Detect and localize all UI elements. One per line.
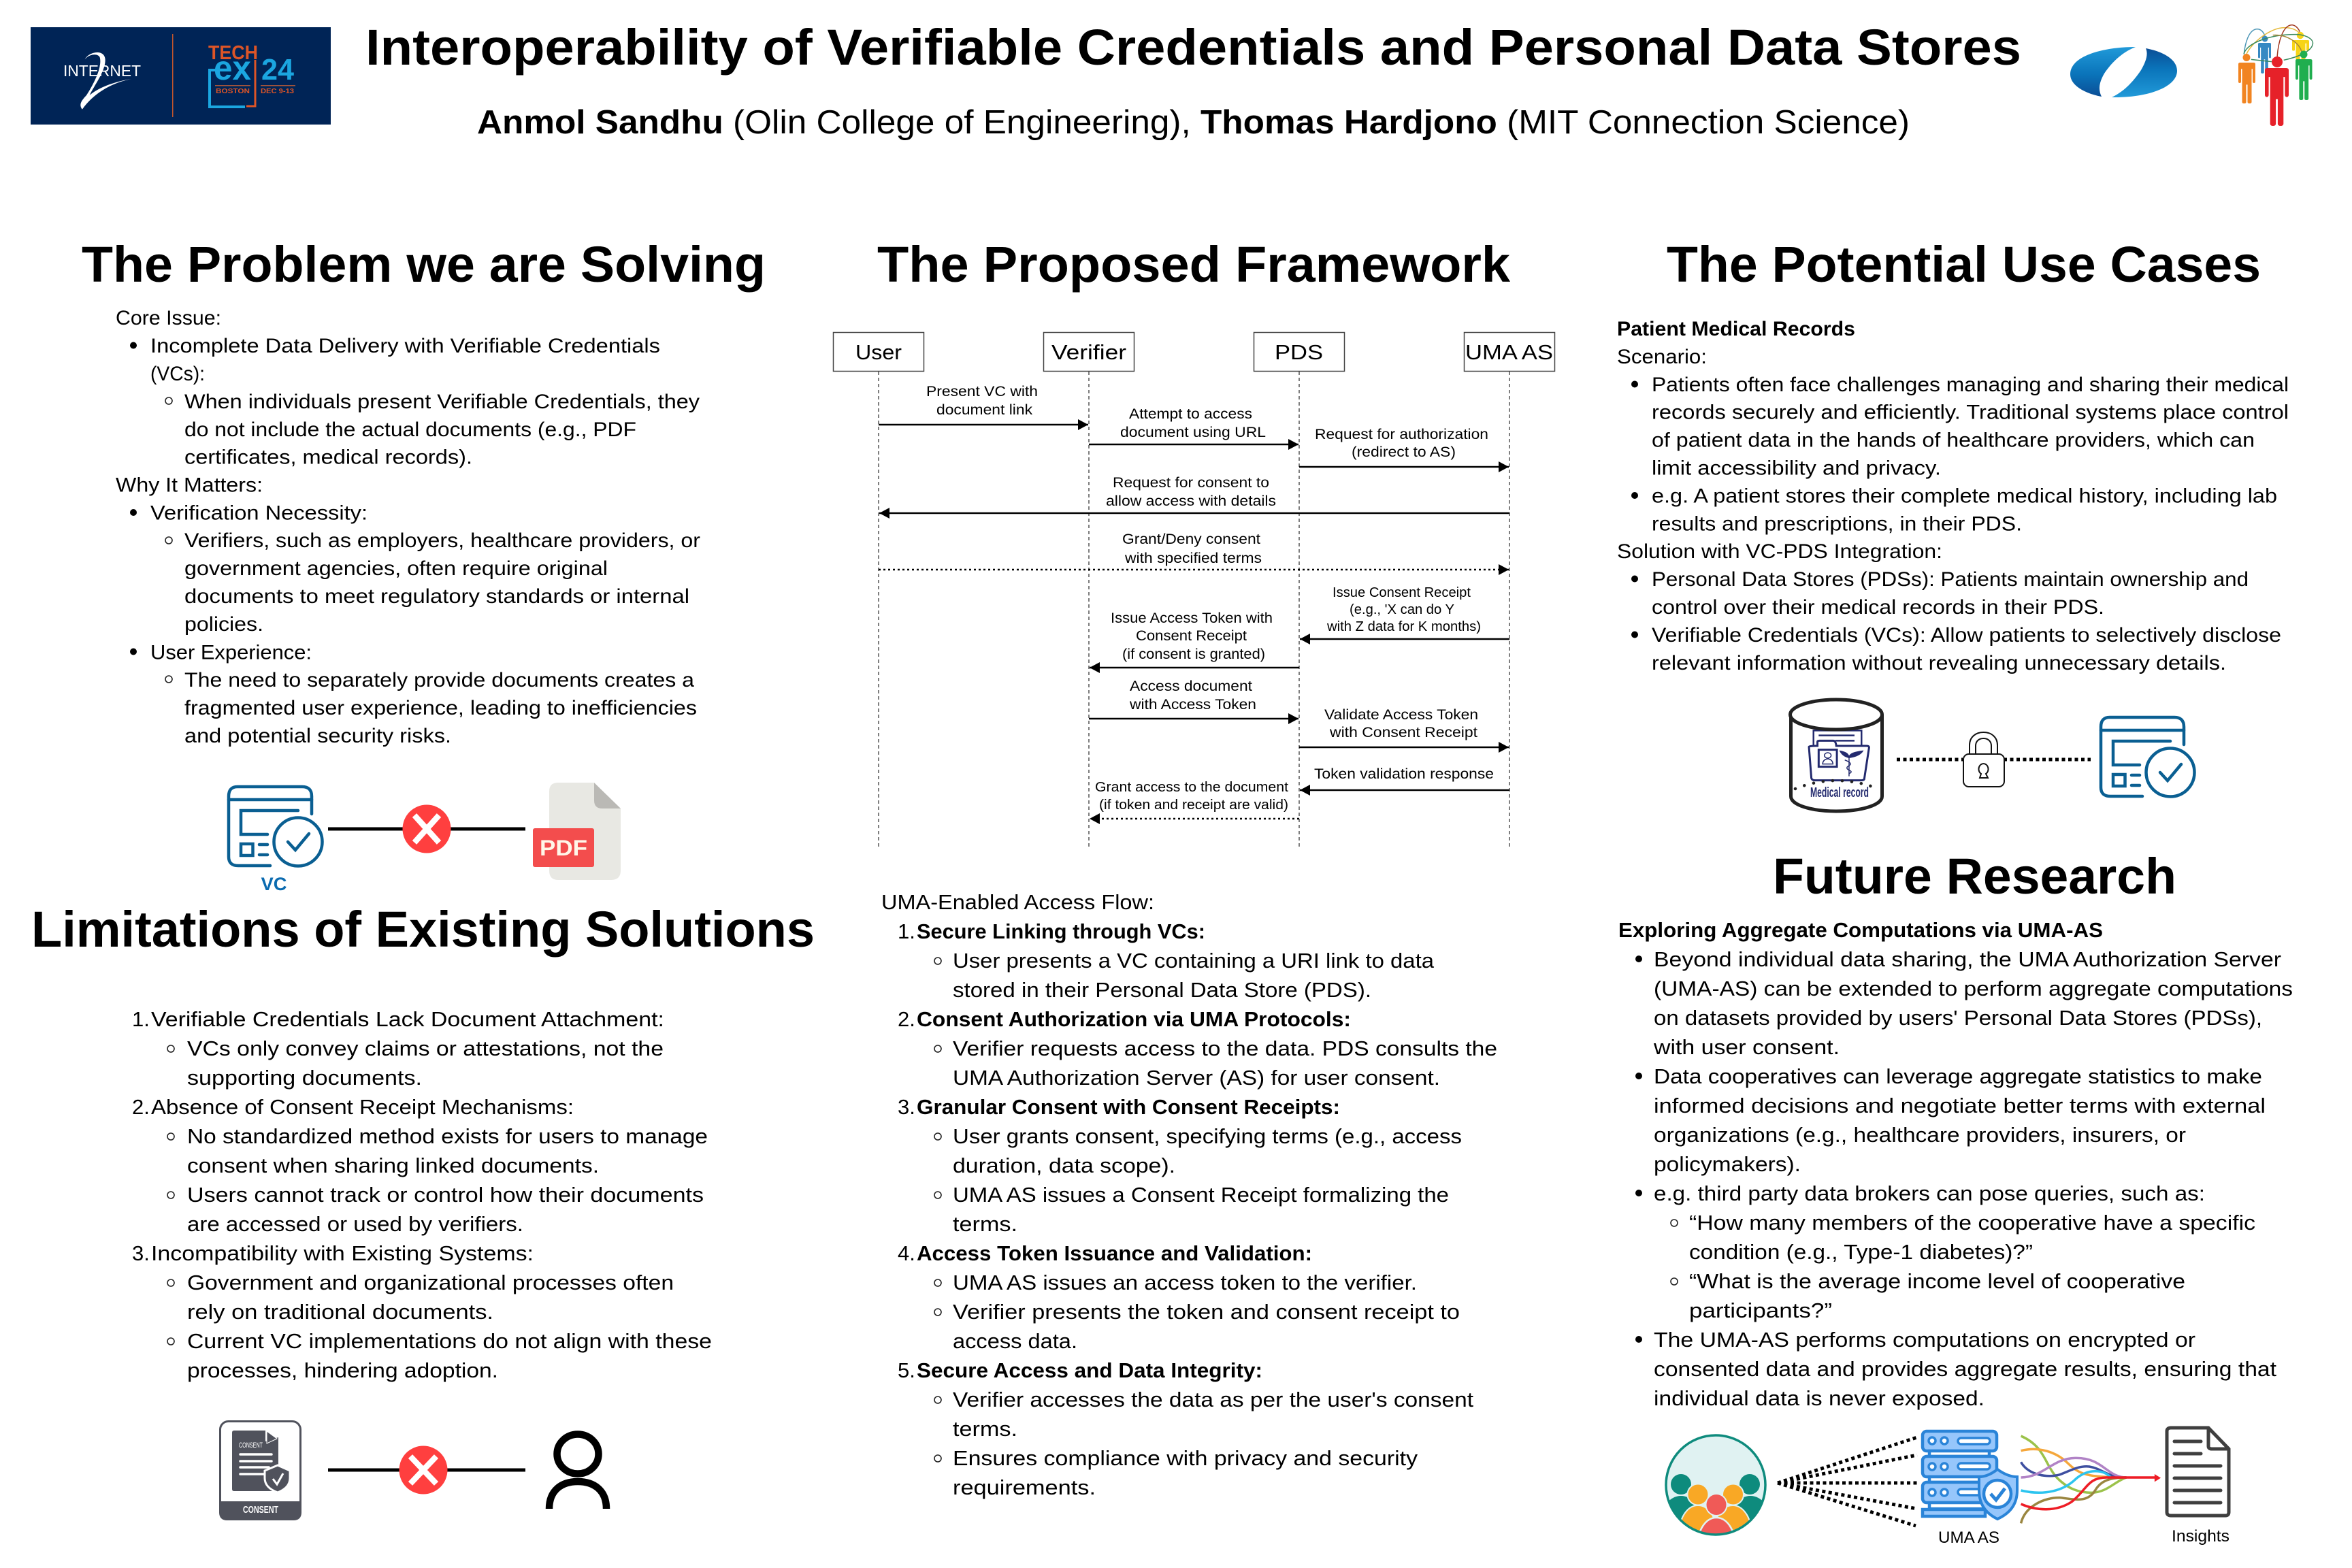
logo: Internet2 TechEx 24 [31, 27, 331, 125]
logo: Internet2 TechEx 24: 24 [261, 53, 295, 86]
icon: consent document card: CONSENT [243, 1504, 278, 1516]
logo: blue ellipse [2070, 47, 2177, 97]
lifeline names: Verifier [1051, 340, 1126, 364]
text block: UMA-enabled access flow: UMA Authorization Server (AS) for user consent. [953, 1066, 1440, 1090]
text block: UMA-enabled access flow: UMA AS issues an access token to the verifier. [953, 1271, 1417, 1294]
message labels: with Access Token [1129, 697, 1256, 713]
text block: patient medical records: relevant information without revealing unnecessary details. [1652, 652, 2226, 674]
text block: patient medical records: e.g. A patient stores their complete medical history, including lab [1652, 485, 2277, 507]
panel: limitations of existing solutions [31, 901, 815, 1520]
message labels: Grant access to the document [1095, 780, 1288, 795]
message labels: (if consent is granted) [1122, 647, 1265, 662]
icon: UMA AS server with shield [1923, 1431, 2017, 1519]
text block: problem description: Incomplete Data Delivery with Verifiable Credentials [150, 335, 660, 357]
text block: UMA-enabled access flow: 1. [898, 919, 915, 943]
text block: patient medical records: records securely and efficiently. Traditional systems place control [1652, 402, 2289, 424]
text block: UMA-enabled access flow: Granular Consent with Consent Receipts: [917, 1095, 1340, 1119]
text block: patient medical records: Verifiable Credentials (VCs): Allow patients to selectively disclose [1652, 624, 2281, 647]
text block: aggregate computations [1618, 918, 2293, 1410]
message labels: Grant/Deny consent [1122, 532, 1260, 547]
text block: patient medical records: results and prescriptions, in their PDS. [1652, 512, 2022, 535]
message labels: Validate Access Token [1324, 707, 1478, 723]
text block: UMA-enabled access flow: User presents a VC containing a URI link to data [953, 949, 1435, 973]
text block: limitations list: Absence of Consent Receipt Mechanisms: [151, 1095, 574, 1119]
message labels: Present VC with [926, 384, 1038, 399]
text block: problem description: do not include the actual documents (e.g., PDF [184, 419, 636, 441]
text block: aggregate computations: on datasets provided by users' Personal Data Stores (PDSs), [1654, 1006, 2262, 1030]
text block: UMA-enabled access flow: terms. [953, 1417, 1017, 1441]
dotted fan connectors [1778, 1437, 1917, 1526]
label: VC: VC [261, 874, 287, 894]
panel: future research [1618, 848, 2293, 1568]
text block: patient medical records [1617, 318, 2289, 674]
text block: limitations list: VCs only convey claims or attestations, not the [187, 1036, 664, 1060]
icon: padlock [1963, 732, 2004, 787]
text block: problem description: fragmented user experience, leading to inefficiencies [184, 697, 697, 719]
text block: UMA-enabled access flow: duration, data scope). [953, 1154, 1175, 1177]
text block: limitations list: Users cannot track or control how their documents [187, 1183, 704, 1207]
text block: patient medical records: Patient Medical Records [1617, 318, 1855, 340]
message labels: Request for authorization [1315, 427, 1488, 442]
message labels: Issue Consent Receipt [1333, 585, 1471, 600]
lifeline names: UMA AS [1465, 340, 1553, 364]
diagram: aggregate computation flow [1665, 1426, 2231, 1545]
text block: aggregate computations: individual data is never exposed. [1654, 1386, 1984, 1410]
message labels: Consent Receipt [1136, 628, 1247, 644]
connector line [328, 828, 525, 830]
logo: Internet2 TechEx 24: ex [214, 49, 251, 87]
text block: problem description: documents to meet regulatory standards or internal [184, 585, 689, 608]
lifeline names: PDS [1275, 340, 1323, 364]
text block: UMA-enabled access flow: UMA AS issues a Consent Receipt formalizing the [953, 1183, 1449, 1207]
icon: verifiable credential [229, 787, 323, 866]
message arrows [879, 425, 1509, 819]
text block: problem description: and potential security risks. [184, 725, 451, 747]
logo: Internet2 TechEx 24: TECH [208, 42, 258, 64]
text block: aggregate computations: participants?” [1689, 1298, 1832, 1322]
text block: UMA-enabled access flow: requirements. [953, 1475, 1096, 1499]
text block: problem description [116, 307, 700, 747]
text block: UMA-enabled access flow: 3. [898, 1095, 915, 1119]
logo: Internet2 TechEx 24: INTERNET [63, 62, 141, 80]
text block: problem description: User Experience: [150, 641, 312, 664]
heading: use cases: The Potential Use Cases [1667, 236, 2261, 293]
text block: aggregate computations: Beyond individual data sharing, the UMA Authorization Server [1654, 947, 2281, 971]
text block: aggregate computations: informed decisions and negotiate better terms with external [1654, 1094, 2266, 1117]
message labels: Attempt to access [1129, 406, 1252, 422]
text block: limitations list: 1. [132, 1007, 150, 1031]
message labels: with Z data for K months) [1326, 619, 1481, 634]
text block: UMA-enabled access flow: access data. [953, 1329, 1077, 1353]
text block: limitations list: supporting documents. [187, 1066, 422, 1090]
message labels: with Consent Receipt [1329, 725, 1477, 740]
text block: UMA-enabled access flow: terms. [953, 1212, 1017, 1236]
text block: aggregate computations: organizations (e.g., healthcare providers, insurers, or [1654, 1123, 2186, 1147]
text block: aggregate computations: Data cooperatives can leverage aggregate statistics to make [1654, 1064, 2262, 1088]
sequence diagram [833, 332, 1554, 849]
aggregation curves [2021, 1436, 2161, 1523]
text block: problem description: Verifiers, such as employers, healthcare providers, or [184, 529, 700, 552]
text block: patient medical records: Scenario: [1617, 346, 1707, 368]
title: Interoperability of Verifiable Credentials and Personal Data Stores [365, 19, 2021, 76]
message labels: Issue Access Token with [1111, 610, 1273, 626]
text block: UMA-enabled access flow: Verifier accesses the data as per the user's consent [953, 1388, 1473, 1411]
text block: patient medical records: Solution with VC-PDS Integration: [1617, 540, 1942, 563]
message labels: with specified terms [1124, 551, 1262, 566]
text block: aggregate computations: (UMA-AS) can be extended to perform aggregate computations [1654, 977, 2293, 1000]
icon: red cross [399, 1446, 448, 1494]
panel: the potential use cases [1617, 236, 2289, 811]
text block: problem description: When individuals present Verifiable Credentials, they [184, 391, 700, 413]
lifeline boxes [833, 332, 1554, 372]
text block: UMA-enabled access flow: Verifier presents the token and consent receipt to [953, 1300, 1460, 1324]
icon: consent document card [219, 1421, 301, 1520]
text block: problem description: (VCs): [150, 363, 205, 385]
text block: problem description: Why It Matters: [116, 474, 263, 496]
text block: limitations list: Verifiable Credentials Lack Document Attachment: [151, 1007, 664, 1031]
text block: problem description: Verification Necessity: [150, 502, 368, 524]
icon: data cooperative group [1665, 1434, 1767, 1536]
logo: Internet2 TechEx 24: BOSTON [216, 88, 250, 95]
message labels: (redirect to AS) [1352, 444, 1456, 460]
heading: framework: The Proposed Framework [877, 236, 1511, 293]
icon: PDF file: PDF [540, 836, 587, 860]
message labels: document link [936, 402, 1033, 418]
text block: aggregate computations: with user consent. [1653, 1035, 1840, 1059]
message labels: Token validation response [1314, 766, 1494, 782]
heading: limitations: Limitations of Existing Solutions [31, 901, 815, 958]
text block: problem description: Core Issue: [116, 307, 221, 329]
text block: limitations list: Government and organizational processes often [187, 1271, 674, 1294]
dotted connector [1897, 758, 2091, 761]
text block: limitations list [132, 1007, 712, 1382]
text block: UMA-enabled access flow: UMA-Enabled Access Flow: [881, 890, 1154, 914]
heading: the problem: The Problem we are Solving [82, 236, 766, 293]
text block: UMA-enabled access flow: Verifier requests access to the data. PDS consults the [953, 1036, 1497, 1060]
text block: UMA-enabled access flow: User grants consent, specifying terms (e.g., access [953, 1124, 1462, 1148]
message labels: (e.g., 'X can do Y [1350, 602, 1454, 617]
text block: UMA-enabled access flow: Secure Access and Data Integrity: [917, 1358, 1262, 1382]
icon: user [549, 1435, 606, 1509]
text block: problem description: policies. [184, 613, 263, 636]
text block: problem description: certificates, medical records). [184, 446, 472, 468]
text block: UMA-enabled access flow: 4. [898, 1241, 915, 1265]
label: insights: Insights [2172, 1527, 2230, 1546]
text block: limitations list: rely on traditional documents. [187, 1300, 493, 1324]
text block: problem description: The need to separately provide documents creates a [184, 669, 694, 691]
icon: consent document card: CONSENT [239, 1441, 263, 1450]
authors: Anmol Sandhu (Olin College of Engineering), Thomas Hardjono (MIT Connection Science) [477, 104, 1910, 141]
connector line [328, 1469, 525, 1471]
text block: aggregate computations: consented data and provides aggregate results, ensuring that [1654, 1357, 2276, 1381]
panel: the proposed framework [833, 236, 1554, 1499]
text block: UMA-enabled access flow: 2. [898, 1007, 915, 1031]
text block: UMA-enabled access flow: Ensures compliance with privacy and security [953, 1446, 1418, 1470]
icon: insights document [2167, 1428, 2229, 1516]
icon: medical record database [1790, 700, 1882, 811]
text block: patient medical records: control over their medical records in their PDS. [1652, 596, 2104, 619]
text block: UMA-enabled access flow: Access Token Issuance and Validation: [917, 1241, 1312, 1265]
text block: UMA-enabled access flow: stored in their Personal Data Store (PDS). [953, 978, 1371, 1002]
icon: red cross [403, 804, 451, 853]
message labels: (if token and receipt are valid) [1099, 798, 1288, 813]
lifeline names [855, 340, 1553, 364]
logo: connected people [2238, 25, 2313, 126]
text block: limitations list: No standardized method exists for users to manage [187, 1124, 708, 1148]
logo: Internet2 TechEx 24: DEC 9-13 [261, 88, 294, 95]
text block: patient medical records: limit accessibility and privacy. [1652, 457, 1941, 479]
message labels: Request for consent to [1113, 475, 1269, 491]
text block: aggregate computations: e.g. third party data brokers can pose queries, such as: [1654, 1181, 2205, 1205]
heading: future research: Future Research [1773, 848, 2176, 904]
message labels: Access document [1130, 679, 1252, 694]
text block: aggregate computations: The UMA-AS performs computations on encrypted or [1654, 1328, 2195, 1352]
label: UMA AS: UMA AS [1938, 1529, 1999, 1547]
text block: aggregate computations: Exploring Aggregate Computations via UMA-AS [1618, 918, 2103, 942]
text block: UMA-enabled access flow [881, 890, 1497, 1499]
diagram: consent not linked to user [219, 1421, 606, 1520]
text block: aggregate computations: policymakers). [1654, 1152, 1801, 1176]
text block: patient medical records: Patients often face challenges managing and sharing their medical [1652, 374, 2289, 396]
text block: UMA-enabled access flow: Secure Linking through VCs: [917, 919, 1205, 943]
panel: the problem we are solving [82, 236, 766, 894]
text block: aggregate computations: condition (e.g., Type-1 diabetes)?” [1689, 1240, 2033, 1264]
text block: aggregate computations: “What is the average income level of cooperative [1689, 1269, 2185, 1293]
text block: patient medical records: of patient data in the hands of healthcare providers, which can [1652, 429, 2255, 452]
text block: problem description: government agencies, often require original [184, 557, 608, 580]
message labels [926, 384, 1494, 813]
text block: limitations list: consent when sharing linked documents. [187, 1154, 599, 1177]
message labels: allow access with details [1106, 493, 1276, 509]
icon: PDF file [533, 783, 621, 880]
text block: limitations list: Incompatibility with Existing Systems: [151, 1241, 534, 1265]
message labels: document using URL [1120, 425, 1266, 440]
text block: UMA-enabled access flow: 5. [898, 1358, 915, 1382]
text block: limitations list: are accessed or used by verifiers. [187, 1212, 523, 1236]
diagram: medical record secured to VC [1790, 700, 2194, 811]
text block: aggregate computations: “How many members of the cooperative have a specific [1689, 1211, 2255, 1235]
icon: medical record database: Medical record [1810, 785, 1869, 800]
text block: limitations list: 3. [132, 1241, 150, 1265]
text block: patient medical records: Personal Data Stores (PDSs): Patients maintain ownership and [1652, 568, 2249, 591]
text block: UMA-enabled access flow: Consent Authorization via UMA Protocols: [917, 1007, 1351, 1031]
text block: limitations list: processes, hindering adoption. [187, 1358, 498, 1382]
lifeline names: User [855, 340, 902, 364]
text block: limitations list: Current VC implementations do not align with these [187, 1329, 712, 1353]
text block: limitations list: 2. [132, 1095, 150, 1119]
icon: verifiable credential [2101, 717, 2194, 796]
diagram: VC does not include PDF [229, 783, 621, 894]
